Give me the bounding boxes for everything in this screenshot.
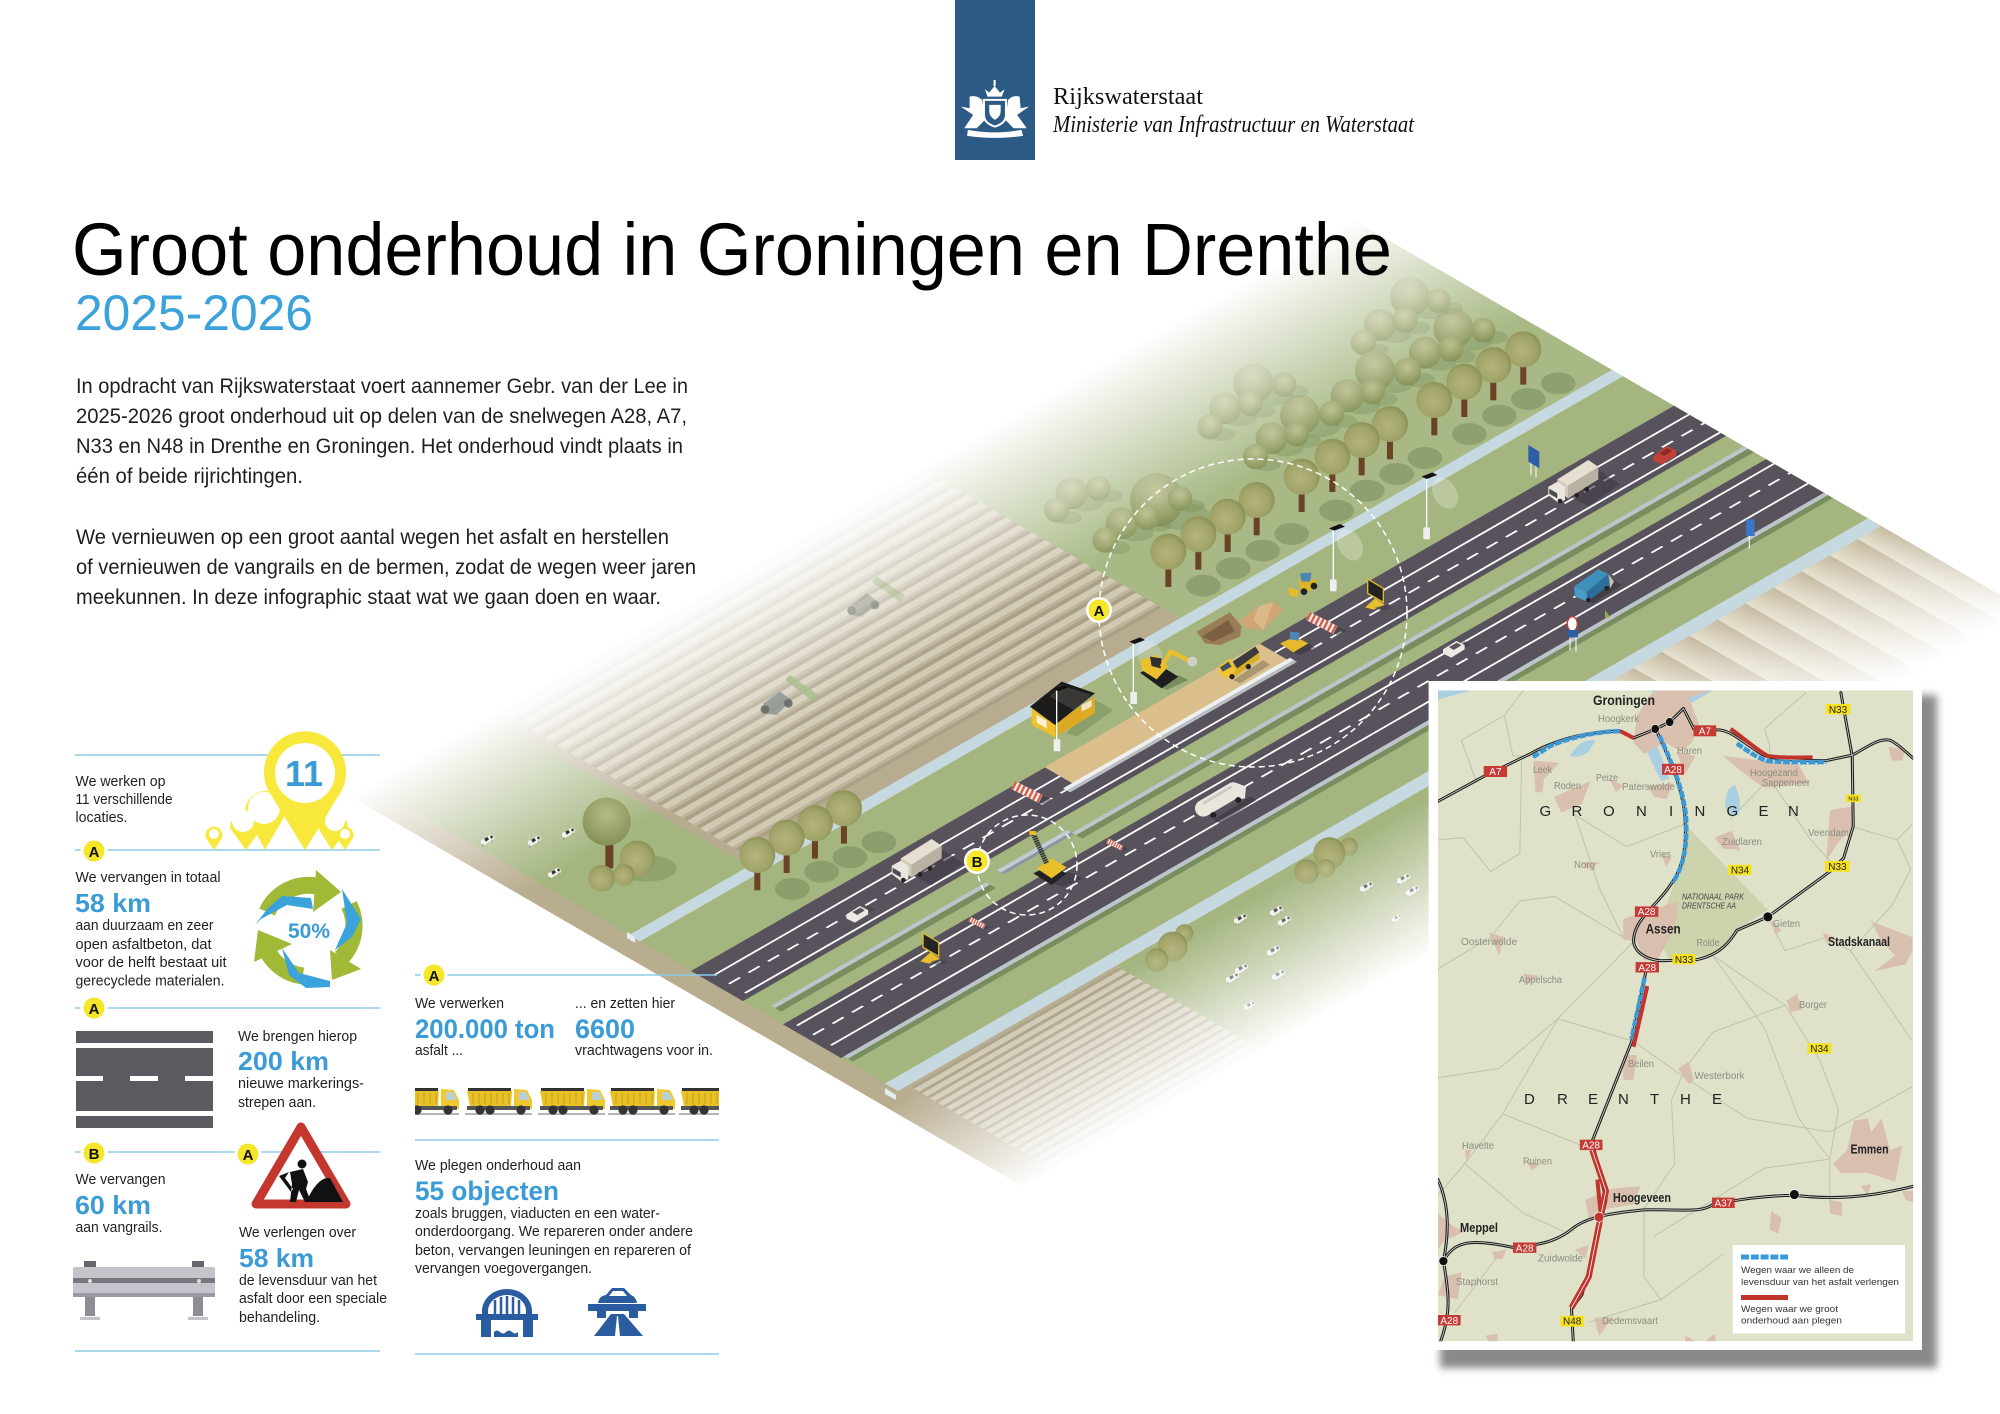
text: locations: We werken op	[76, 773, 166, 790]
text: 60 km: We vervangen	[76, 1171, 166, 1188]
text: lifetime extension: de levensduur van het	[239, 1272, 378, 1289]
ministry name	[1052, 84, 1415, 138]
ditch end caps	[627, 932, 896, 1100]
map place names: Emmen	[1850, 1143, 1888, 1157]
marker B on illustration	[964, 848, 990, 874]
road roller	[1280, 632, 1315, 655]
map place names: Staphorst	[1456, 1277, 1498, 1288]
text: 55 objects: onderdoorgang. We repareren onder andere	[415, 1223, 693, 1240]
panel: guardrails	[73, 1171, 215, 1320]
road barriers	[970, 616, 1347, 929]
map place names: Assen	[1646, 922, 1681, 937]
vehicles: red car	[1653, 446, 1682, 464]
road upper carriageway	[691, 406, 1726, 1001]
panel: 58 km replaced	[75, 869, 361, 990]
excavator	[1140, 652, 1197, 690]
median guardrail	[766, 443, 1754, 1012]
province and local boundaries	[1438, 690, 1912, 1322]
bushes near meadow	[1145, 837, 1358, 972]
icon: road section	[76, 1031, 213, 1128]
map legend	[1733, 1245, 1905, 1334]
text: 58 km: 58 km	[75, 888, 151, 918]
panel: left column rules	[75, 755, 719, 1354]
map road shields: N33	[1848, 796, 1858, 802]
subtitle year: 2025-2026	[75, 285, 313, 341]
map place names: Hoogkerk	[1598, 714, 1640, 725]
red sections: major maintenance	[1572, 729, 1813, 1308]
panel: road markings	[76, 1028, 364, 1128]
icon: recycling arrows: 50%	[288, 920, 330, 943]
icon: location pins: 11	[285, 753, 323, 794]
text: lifetime extension: We verlengen over	[239, 1224, 356, 1241]
trees, front rows	[1150, 331, 1576, 597]
badge A	[420, 962, 448, 988]
badge A	[234, 1140, 262, 1168]
map place names: Haren	[1677, 746, 1702, 757]
fade to white, lower right	[876, 521, 2000, 1194]
blue sections: lifetime extension	[1533, 731, 1826, 1039]
text: 200.000 ton: 200.000 ton	[415, 1014, 555, 1044]
map place names: Hoogeveen	[1613, 1191, 1671, 1205]
text: locations	[76, 773, 172, 826]
map place names: Dedemsvaart	[1602, 1316, 1658, 1327]
national park	[1658, 826, 1768, 960]
map place names: Groningen	[1593, 693, 1655, 708]
map road shields: N33	[1829, 705, 1848, 716]
text: 58 km: We vervangen in totaal	[76, 869, 220, 886]
badge A	[80, 994, 108, 1022]
map legend: levensduur van het asfalt verlengen	[1741, 1277, 1899, 1288]
text: 58 km: gerecyclede materialen.	[76, 972, 224, 990]
panel: asphalt and trucks	[415, 997, 719, 1115]
dashed work zone circle A	[1099, 459, 1407, 767]
marker A on illustration	[1086, 597, 1112, 623]
map place names: Gieten	[1773, 919, 1800, 930]
title: Groot onderhoud in Groningen en Drenthe	[72, 208, 1392, 291]
map place names: Paterswolde	[1622, 782, 1675, 793]
map place names: Oosterwolde	[1461, 937, 1517, 948]
intro text: 2025-2026 groot onderhoud uit op delen van de snelwegen A28, A7,	[76, 405, 687, 428]
text: 200 km: 200 km	[238, 1046, 329, 1076]
front bank	[336, 776, 1044, 1187]
road markings upper	[714, 414, 1720, 993]
text: 6600 trucks: 6600	[575, 1014, 635, 1044]
earth pile and pit	[1197, 602, 1283, 645]
text: 60 km: 60 km	[75, 1190, 151, 1220]
vehicles: lorries	[892, 460, 1620, 885]
text: 6600 trucks: ... en zetten hier	[575, 995, 675, 1012]
text: 200 km: nieuwe markerings-	[238, 1075, 364, 1092]
icon: recycling arrows	[254, 870, 361, 988]
map place names: Roden	[1554, 781, 1581, 792]
junctions	[1439, 718, 1799, 1266]
map place names: Hoogezand	[1750, 768, 1798, 779]
map road shields	[1438, 704, 1861, 1328]
text: 200.000 ton: asfalt ...	[415, 1042, 463, 1059]
ministry name: Ministerie van Infrastructuur en Waterstaat	[1052, 112, 1415, 138]
map place names: GRONINGEN	[1540, 803, 1799, 820]
map place names: Havelte	[1462, 1141, 1494, 1152]
logo bar	[955, 0, 1035, 160]
map place names: Ruinen	[1523, 1157, 1552, 1168]
map place names: Appelscha	[1519, 975, 1562, 986]
panel: objects maintenance	[415, 1157, 693, 1337]
text: 6600 trucks	[575, 995, 713, 1059]
text: 55 objects: 55 objecten	[415, 1176, 559, 1206]
wheel loader	[1288, 573, 1317, 598]
icon: royal crest	[961, 80, 1029, 138]
site office building	[1030, 682, 1113, 751]
map place names: Peize	[1596, 773, 1618, 784]
map drop shadow	[1440, 695, 1937, 1368]
marker B on illustration: B	[972, 854, 983, 871]
map place names: Zuidlaren	[1722, 837, 1762, 848]
text: 55 objects: zoals bruggen, viaducten en een water-	[415, 1205, 660, 1222]
near meadow	[1116, 684, 1751, 1050]
motorways	[1438, 693, 1913, 1341]
lower guardrail	[844, 493, 1833, 1061]
map place names: DRENTSCHE AA	[1682, 901, 1736, 911]
map legend: Wegen waar we groot	[1741, 1304, 1838, 1315]
tree meadow	[907, 211, 1614, 619]
concrete barrier	[1063, 658, 1297, 792]
text: 55 objects	[415, 1157, 693, 1277]
vehicles: white cars	[846, 641, 1471, 923]
panel: locations	[76, 731, 354, 850]
trees, back rows	[1044, 277, 1508, 554]
map road shields: A7	[1489, 767, 1502, 778]
text: lifetime extension: asfalt door een speciale	[239, 1290, 387, 1307]
text: 200 km: strepen aan.	[238, 1094, 316, 1111]
map road shields: A28	[1516, 1243, 1534, 1254]
map road shields: A28	[1638, 907, 1656, 918]
map road shields: N33	[1828, 862, 1847, 873]
text: 55 objects: vervangen voegovergangen.	[415, 1260, 592, 1277]
water	[1438, 690, 1740, 815]
intro text: In opdracht van Rijkswaterstaat voert aannemer Gebr. van der Lee in	[76, 375, 688, 398]
map place names: Meppel	[1460, 1221, 1498, 1235]
intro text: één of beide rijrichtingen.	[76, 465, 303, 488]
map place names: Westerbork	[1694, 1071, 1745, 1082]
road markings lower	[797, 464, 1808, 1045]
map place names: Leek	[1533, 765, 1553, 776]
ministry name: Rijkswaterstaat	[1053, 84, 1203, 110]
text: 6600 trucks: vrachtwagens voor in.	[575, 1042, 713, 1059]
map graphic	[1438, 690, 1913, 1341]
badge A	[80, 838, 108, 864]
text: 200 km	[238, 1028, 364, 1111]
fade to white, upper left	[316, 196, 1541, 901]
map frame	[1429, 681, 1922, 1350]
map place names: Beilen	[1628, 1059, 1654, 1070]
built-up areas	[1438, 690, 1913, 1341]
intro text: of vernieuwen de vangrails en de bermen, zodat de wegen weer jaren	[76, 556, 696, 579]
ditch upper	[629, 370, 1623, 941]
map place names: Norg	[1574, 860, 1595, 871]
vehicles: blue truck	[1574, 569, 1622, 603]
text: 58 km: aan duurzaam en zeer	[76, 917, 214, 934]
far field wide bands	[1606, 526, 2000, 768]
cows	[481, 828, 1419, 1012]
map place names: NATIONAAL PARK	[1682, 892, 1744, 902]
text: 60 km	[75, 1171, 166, 1236]
sand strip of the work zone	[1044, 644, 1288, 783]
trees beside the lower road section	[583, 790, 896, 900]
badge B	[80, 1140, 108, 1166]
badge A: A	[429, 968, 440, 985]
map road shields: A28	[1664, 765, 1682, 776]
map road shields: N34	[1731, 866, 1750, 876]
near field	[898, 966, 1261, 1175]
badge A: A	[243, 1147, 254, 1164]
icon: guardrail	[73, 1261, 215, 1320]
dashed work zone circle B	[977, 815, 1077, 915]
map legend: onderhoud aan plegen	[1741, 1316, 1842, 1326]
badge A: A	[89, 1001, 100, 1018]
icon: bridge over water	[476, 1289, 538, 1337]
text: 60 km: aan vangrails.	[76, 1219, 162, 1236]
map place names: Veendam	[1808, 828, 1849, 839]
badge A: A	[89, 844, 100, 861]
road signs	[1528, 445, 1755, 652]
text: 200.000 ton: We verwerken	[415, 995, 504, 1012]
crane on the median	[1029, 831, 1083, 887]
ground plane	[336, 211, 2000, 1187]
field with furrows, left	[484, 459, 1164, 851]
intro text: meekunnen. In deze infographic staat wat we gaan doen en waar.	[76, 586, 661, 609]
text: 58 km: voor de helft bestaat uit	[76, 954, 227, 971]
text: lifetime extension: behandeling.	[239, 1309, 320, 1326]
road lower carriageway	[783, 459, 1824, 1058]
illustration: isometric motorway landscape	[316, 196, 2000, 1194]
map place names: Stadskanaal	[1828, 935, 1890, 949]
icon: viaduct with car	[588, 1288, 646, 1336]
text: lifetime extension	[239, 1224, 387, 1326]
arrow board trailers	[920, 579, 1393, 965]
map place names: DRENTHE	[1524, 1091, 1722, 1108]
map road shields: N33	[1675, 955, 1694, 966]
intro text	[76, 375, 696, 609]
icon: location pins	[206, 731, 354, 850]
map road shields: A28	[1582, 1140, 1600, 1152]
map legend: Wegen waar we alleen de	[1741, 1265, 1854, 1276]
text: locations: locaties.	[76, 809, 128, 826]
panel: map	[1429, 681, 1922, 1350]
text: 58 km	[75, 869, 227, 990]
map place names: Vries	[1650, 850, 1671, 860]
tractors in the field	[761, 577, 905, 715]
icon: warning triangle with road worker	[256, 1127, 346, 1204]
dump truck on sand	[1218, 647, 1270, 683]
map road shields: A28	[1638, 963, 1657, 974]
map road shields: A7	[1699, 726, 1711, 737]
intro text: We vernieuwen op een groot aantal wegen het asfalt en herstellen	[76, 526, 669, 549]
text: 55 objects: beton, vervangen leuningen en repareren of	[415, 1242, 692, 1259]
map road shields: A28	[1440, 1316, 1459, 1327]
text: locations: 11 verschillende	[76, 791, 172, 808]
map place names	[1456, 693, 1890, 1327]
vehicles: tanker	[1203, 783, 1257, 823]
badge B: B	[89, 1146, 100, 1163]
map place names: Zuidwolde	[1538, 1254, 1583, 1264]
intro text: N33 en N48 in Drenthe en Groningen. Het onderhoud vindt plaats in	[76, 435, 683, 458]
ditch lower	[885, 518, 1881, 1091]
icon: row of dump trucks	[415, 1088, 719, 1115]
text: 58 km: open asfaltbeton, dat	[76, 936, 212, 953]
roadside lamps	[1129, 472, 1463, 704]
text: 200.000 ton	[415, 995, 555, 1059]
map place names: Sappemeer	[1762, 778, 1811, 789]
map place names: Borger	[1799, 1000, 1828, 1011]
map road shields: N48	[1563, 1317, 1582, 1328]
map road shields: A37	[1715, 1198, 1733, 1209]
text: 55 objects: We plegen onderhoud aan	[415, 1157, 581, 1174]
text: 200 km: We brengen hierop	[238, 1028, 357, 1045]
text: lifetime extension: 58 km	[239, 1243, 314, 1273]
map road shields: N34	[1810, 1044, 1829, 1055]
map place names: Rolde	[1696, 938, 1720, 949]
marker A on illustration: A	[1094, 603, 1105, 620]
